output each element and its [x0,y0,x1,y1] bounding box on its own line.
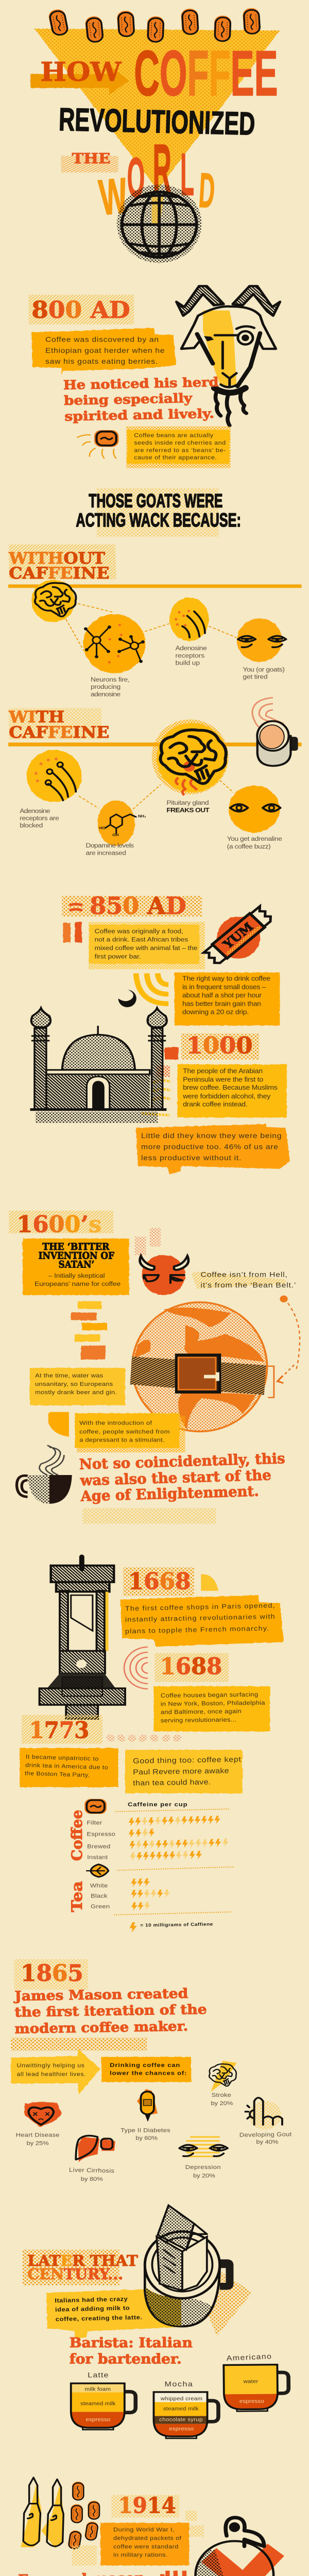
title: THE with striped block [61,150,118,173]
step: dopamine levels: NH₂ [138,814,146,818]
cup diagram: mocha: chocolate syrup [159,2417,202,2423]
title: WORLD: W [96,168,131,226]
text box: military rations: coffee were standard [113,2543,178,2550]
section: title: D [197,163,216,218]
step: dopamine levels: Dopamine levels [85,842,134,849]
text box: Paris coffee shops: plans to topple the French monarchy. [125,1624,269,1635]
icon: steaming bean [77,430,118,459]
heading: without caffeine [8,545,116,582]
text box: American coffee houses: in New York, Boston, Philadelphia [161,1699,265,1707]
section: bean belt and enlightenment [17,1302,296,1719]
cup diagram: mocha [153,2380,218,2438]
divider bar [8,584,301,588]
section: latte and barista [23,2206,289,2438]
text box: bitter invention of Satan: THE ‘BITTER [42,1241,110,1252]
heading: with caffeine: CAFFEINE [9,723,109,741]
statement: James Mason: the first iteration of the [14,2002,207,2020]
text box: Paul Revere: Paul Revere more awake [133,1767,229,1776]
icon: devil face [140,1255,188,1295]
cup diagram: americano: Americano [226,2352,271,2363]
step: neurons fire [83,614,145,698]
text box: beer and gin: At the time, water was [35,1372,103,1379]
callout: bean belt: Coffee isn’t from Hell, [201,1271,287,1279]
stat: stroke: by 20% [211,2100,233,2107]
text box: power bar: not a drink. East African tribes [95,936,188,943]
text box: unpatriotic tea: It became unpatriotic to [26,1753,99,1762]
callout: more productive: Little did they know they were being [141,1132,281,1140]
decorative red rings [159,2571,184,2576]
tea group: Tea [69,1881,85,1912]
icon: coffee bean cluster [67,2482,100,2550]
step: adenosine receptors are blocked: blocked [20,822,43,829]
tea group: White [90,1882,108,1889]
step: you get tired: get tired [243,673,268,680]
dashed arrow: to bean belt [280,1295,300,1371]
arrow: healthier lives: all lead healthier lives. [17,2072,85,2077]
statement: James Mason: James Mason created [13,1986,188,2004]
decorative dotted strip [83,1508,216,1524]
heading: those goats were acting wack [76,488,241,537]
text box: beans are seeds [126,426,231,468]
heading: 1773: 1773 [29,1717,89,1744]
cup diagram: mocha: Mocha [165,2380,193,2388]
stat: type II diabetes: Type II Diabetes [121,2127,170,2133]
text box: small doses [175,972,280,1026]
icon: halftone globe [117,184,201,263]
section: caffeine science [8,545,301,856]
text box: Paul Revere [125,1750,243,1793]
text box: military rations [100,2523,189,2566]
heading: barista: Barista: Italian [70,2335,193,2351]
stat: depression: Depression [185,2164,221,2171]
text box: small doses: has better brain gain than [182,1000,261,1007]
step: adenosine receptors are blocked [20,750,82,829]
stat: depression [179,2137,228,2179]
step: adrenaline buzz: You get adrenaline [227,835,282,842]
divider bar [8,742,301,747]
decorative stacked bars [71,1301,108,1360]
text box: depressant to stimulant: coffee, people switched from [79,1428,169,1435]
coffee group: Instant [87,1854,108,1860]
stat: liver cirrhosis: by 80% [81,2176,103,2182]
section: 1600s [9,1124,300,1371]
callout: bean belt: it’s from the ‘Bean Belt.’ [201,1282,296,1290]
stat: heart disease [16,2102,62,2146]
text box: bitter invention of Satan: Europeans’ name for coffee [35,1280,121,1287]
step: you get tired [237,618,286,680]
decorative dotted strip [11,2038,147,2050]
icon: mosque [30,1008,170,1123]
icon: guillotine [40,1557,125,1719]
text box: unpatriotic tea [20,1748,118,1787]
text box: beans are seeds: seeds inside red cherries and [134,439,226,446]
step: dopamine levels: HO [99,826,106,830]
step: adenosine receptors build up: Adenosine [176,645,207,652]
chart: caffeine per cup [69,1799,234,1933]
text box: Arabian Peninsula: drank coffee instead. [183,1100,248,1108]
step: adenosine receptors build up [169,598,209,666]
step: dopamine levels: OH [112,833,119,837]
step: pituitary gland freaks out: FREAKS OUT [166,806,210,814]
title: WORLD: O [127,146,145,209]
heading: 1914: 1914 [118,2493,176,2518]
heading: 800 AD: 800 AD [31,297,130,324]
text box: beans are seeds: Coffee beans are actually [134,432,213,438]
step: adenosine receptors build up: build up [176,659,200,666]
icon: bullets [21,2478,63,2548]
cup diagram: americano: espresso [239,2399,264,2404]
step: pituitary gland freaks out [152,719,229,814]
step: dopamine levels: are increased [85,849,126,856]
coffee group: Coffee [69,1810,85,1861]
tea group [69,1865,170,1912]
text box: discovery: saw his goats eating berries. [45,358,158,366]
coffee group: Espresso [87,1831,115,1837]
stat: developing gout [239,2098,292,2145]
decorative dotted blocks [185,2511,204,2537]
cup diagram: americano: water [243,2379,259,2384]
heading: later that century: LATER THAT [28,2252,138,2270]
coffee group: Filter [87,1819,102,1826]
stat: stroke [209,2061,236,2107]
heading: barista [70,2335,193,2367]
text box: bitter invention of Satan [23,1239,129,1295]
decorative yellow rings [136,973,168,1004]
statement: noticed his herd: He noticed his herd [63,375,219,393]
text box: American coffee houses: serving revolutionaries... [161,1716,236,1724]
text box: small doses: downing a 20 oz drip. [182,1008,249,1015]
text box: Arabian Peninsula: Peninsula were the first to [183,1076,263,1083]
title: WORLD [96,130,216,226]
step: neurons fire: adenosine [91,690,121,698]
text box: beer and gin: unsanitary, so Europeans [35,1381,113,1387]
heading: later that century: CENTURY... [28,2266,123,2283]
cup diagram: latte [71,2371,135,2430]
arrow: healthier lives: Unwittingly helping us [17,2063,84,2069]
icon: coffee mug with steam [252,698,298,766]
text box: Arabian Peninsula [177,1064,287,1117]
step: adrenaline buzz: (a coffee buzz) [227,843,271,850]
callout: more productive: less productive without it. [141,1155,241,1162]
title: WORLD: R [153,130,171,208]
text box: adding milk: Italians had the crazy [55,2296,128,2304]
text box: depressant to stimulant [75,1413,185,1452]
text box: power bar: first power bar. [95,953,141,960]
dashed connectors [79,781,233,809]
heading: later that century [23,2250,138,2285]
arrow behind HOW [30,65,129,95]
chart title: Caffeine per cup [128,1801,187,1808]
step: dopamine levels [85,800,146,856]
statement: age of enlightenment: was also the start of the [79,1466,271,1489]
heading: with caffeine [8,707,109,741]
text box: power bar: Coffee was originally a food, [95,927,183,935]
arrow: healthier lives [11,2049,100,2094]
decorative bars [63,922,82,943]
decorative red blocks [157,1047,178,1077]
title: WORLD: L [180,142,194,208]
heading: without caffeine: CAFFEINE [9,564,109,582]
title background funnel triangle [35,29,280,190]
statement: age of enlightenment [79,1450,285,1504]
heading: with caffeine: WITH [8,707,64,726]
coffee group: Brewed [87,1843,110,1850]
text box: small doses: is in frequent small doses – [182,984,266,991]
statement: noticed his herd [63,375,219,424]
stat: developing gout: Developing Gout [239,2131,292,2139]
text box: beans are seeds: cause of their appearance. [134,454,217,461]
text box: Paris coffee shops: instantly attracting revolutionaries with [125,1613,275,1623]
statement: James Mason: modern coffee maker. [14,2019,188,2037]
cup diagram: mocha: steamed milk [163,2406,199,2412]
text box: bitter invention of Satan: SATAN’ [59,1259,94,1270]
heading: barista: for bartender. [70,2351,182,2367]
icon: YUM candy bar: YUM [219,920,256,952]
heading: 1668: 1668 [128,1568,191,1595]
icon: brain [31,580,76,622]
text box: adding milk: coffee, creating the latte. [56,2314,142,2323]
tea group: Black [91,1892,108,1899]
text box: American coffee houses [153,1686,270,1732]
icon: crescent moon [118,990,136,1007]
text box: Paul Revere: Good thing too: coffee kept [133,1755,242,1765]
cup diagram: latte: milk foam [85,2386,111,2392]
step: pituitary gland freaks out: Pituitary gland [166,799,209,806]
text box: American coffee houses: Coffee houses began surfacing [161,1691,258,1699]
statement: James Mason [13,1986,207,2037]
text box: adding milk: idea of adding milk to [55,2304,130,2313]
callout: more productive [136,1124,290,1174]
text box: military rations: During World War I, [113,2526,175,2533]
decorative concentric rings [124,1647,148,1689]
text box: depressant to stimulant: a depressant to a stimulant. [79,1436,165,1444]
section: title [30,8,280,263]
stat: depression: by 20% [193,2172,215,2179]
section: 800 AD [28,286,280,537]
stat: stroke: Stroke [212,2092,231,2098]
text box: power bar: mixed coffee with animal fat – the [95,944,197,952]
cup diagram: latte: steamed milk [80,2401,116,2406]
cup diagram: americano [224,2352,289,2411]
title: HOW: HOW [40,56,122,87]
text box: lower the chances: Drinking coffee can [110,2062,180,2069]
text box: lower the chances [101,2057,191,2082]
cup diagram: mocha: whipped cream [160,2396,202,2402]
text box: military rations: dehydrated packets of [113,2535,182,2541]
icon: row of coffee beans [47,8,261,43]
stat: heart disease: Heart Disease [16,2131,60,2139]
text box: small doses: about half a shot per hour [182,992,262,999]
chart legend: = 10 milligrams of Caffiene [140,1922,213,1928]
statement: age of enlightenment: Not so coincidentally, this [79,1450,285,1472]
step: adenosine receptors are blocked: receptors are [20,815,59,822]
stat: heart disease: by 25% [27,2140,49,2146]
text box: discovery: Coffee was discovered by an [45,336,159,344]
callout: bean belt [191,1271,296,1290]
decorative block [48,1412,69,1437]
text box: discovery: Ethiopian goat herder when he [45,347,165,355]
text box: lower the chances: lower the chances of: [110,2070,186,2077]
text box: American coffee houses: and Baltimore, once again [161,1708,242,1716]
section: 1688 and 1773 [20,1647,270,1933]
title: THE with striped block: THE [72,150,110,167]
section: 850 AD and 1000 [30,892,287,1123]
statement: age of enlightenment: Age of Enlightenment. [80,1482,259,1504]
stat: liver cirrhosis: Liver Cirrhosis [69,2166,114,2174]
callout: more productive: more productive too. 46% of us are [141,1143,278,1151]
heading: 1600's: 1600’s [17,1211,101,1238]
step: adenosine receptors are blocked: Adenosine [20,807,50,815]
text box: Paul Revere: than tea could have. [133,1778,211,1787]
stat: liver cirrhosis [69,2136,115,2182]
text box: Arabian Peninsula: were forbidden alcohol, they [182,1093,271,1100]
decorative dotted diamonds [107,1735,181,1742]
decorative dotted blocks [135,1228,161,1255]
cup diagram: mocha: espresso [169,2426,194,2432]
text box: beer and gin [29,1368,125,1405]
text box: power bar [89,922,205,969]
text box: unpatriotic tea: the Boston Tea Party. [25,1770,90,1778]
icon: goat with monocle [176,286,280,426]
step: you get tired: You (or goats) [243,666,285,673]
cup diagram: latte: Latte [88,2371,108,2379]
icon: YUM candy bar [203,906,274,966]
stat: type II diabetes: by 60% [135,2134,158,2141]
heading: without caffeine: WITHOUT [8,549,105,567]
text box: bitter invention of Satan: INVENTION OF [39,1250,114,1261]
decorative yellow tab [201,1574,218,1591]
chart legend [114,1912,232,1933]
text box: small doses: The right way to drink coffee [182,975,270,982]
icon: milk carton pouring into mug [145,2206,252,2336]
heading: approx 850 AD: 850 AD [90,892,186,920]
heading: 1688: 1688 [160,1653,222,1680]
text box: Paris coffee shops: The first coffee shops in Paris opened, [125,1602,275,1612]
section: 1865 health [11,1959,292,2182]
step: adrenaline buzz [227,786,282,850]
step: neurons fire: producing [91,683,121,690]
stat: developing gout: by 40% [256,2139,278,2145]
heading: 1000: 1000 [186,1032,253,1059]
coffee group [69,1799,234,1870]
text box: Arabian Peninsula: brew coffee. Because Muslims [183,1084,278,1091]
text box: adding milk [46,2288,176,2337]
statement: noticed his herd: spirited and lively. [64,406,214,424]
text box: unpatriotic tea: drink tea in America due to [25,1761,108,1771]
text box: Arabian Peninsula: The people of the Arabian [183,1067,263,1075]
heading: 1865: 1865 [21,1960,83,1987]
text box: discovery [31,328,176,375]
text box: beans are seeds: are referred to as ‘beans’ be- [134,447,226,453]
step: adenosine receptors build up: receptors [176,652,205,659]
icon: steaming coffee cup [17,1445,72,1504]
cup diagram: latte: espresso [85,2417,110,2423]
bracket and arrow [268,1364,296,1398]
decorative light block [72,2546,96,2566]
text box: beer and gin: mostly drank beer and gin. [35,1388,117,1396]
icon: grenade [196,2518,280,2576]
step: neurons fire: Neurons fire, [91,676,130,683]
tea group: Green [91,1903,110,1910]
text box: Paris coffee shops [120,1595,284,1647]
dashed connectors [66,604,236,651]
text box: bitter invention of Satan: – Initially skeptical [48,1272,105,1279]
text box: depressant to stimulant: With the introduction of [79,1419,152,1426]
statement: noticed his herd: being especially [64,391,193,408]
icon: world with bean belt [130,1302,267,1431]
stat: type II diabetes [121,2089,170,2141]
section: 1914 and 1920 [18,2478,291,2576]
text box: military rations: in military rations. [113,2551,167,2558]
